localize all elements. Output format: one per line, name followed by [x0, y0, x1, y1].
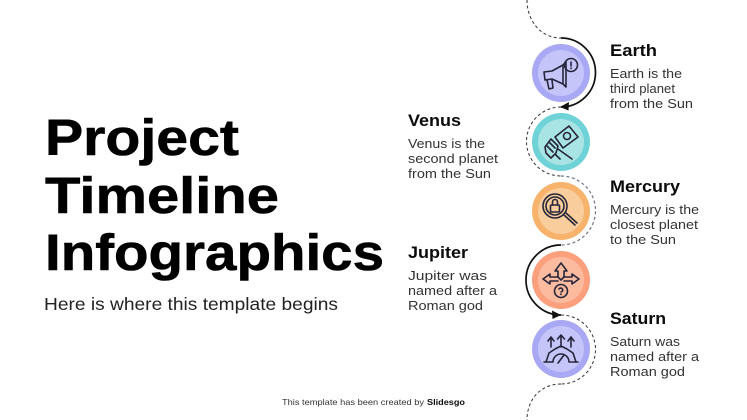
- label: Mercury: to the Sun: [610, 232, 676, 247]
- node: Mercury magnifier: [532, 182, 590, 240]
- label: Venus: second planet: [408, 151, 498, 166]
- label: Earth: Earth: [610, 41, 657, 60]
- label: Jupiter: named after a: [408, 283, 498, 298]
- credit line: This template has been created by: [282, 397, 425, 407]
- label: Jupiter: [408, 243, 498, 313]
- label: Earth: Earth is the: [610, 66, 682, 81]
- label: Saturn: Saturn: [610, 309, 666, 328]
- label: Venus: [408, 111, 498, 181]
- label: Jupiter: Jupiter: [408, 243, 468, 262]
- solid arc arrow: Earth: [560, 38, 596, 110]
- icon: arrows with question mark: [543, 263, 579, 298]
- label: Saturn: [610, 309, 700, 379]
- title: Project: [45, 109, 239, 166]
- title: Infographics: [45, 224, 384, 281]
- credit line: Slidesgo: [427, 397, 465, 407]
- label: Jupiter: Roman god: [408, 298, 483, 313]
- node: Saturn gear arrows: [532, 320, 590, 378]
- label: Saturn: Saturn was: [610, 334, 681, 349]
- icon: hand holding flag: [545, 126, 578, 159]
- label: Earth: [610, 41, 693, 111]
- label: Jupiter: Jupiter was: [408, 268, 488, 283]
- label: Venus: Venus: [408, 111, 461, 130]
- node: Earth megaphone: [532, 44, 590, 102]
- icon: megaphone: [544, 58, 578, 89]
- label: Earth: third planet: [610, 81, 675, 96]
- label: Mercury: Mercury: [610, 177, 681, 196]
- title: Timeline: [45, 167, 279, 224]
- node: Jupiter arrows: [532, 251, 590, 309]
- node: Venus flag in hand: [532, 113, 590, 171]
- label: Saturn: named after a: [610, 349, 700, 364]
- solid arc arrow: Jupiter: [526, 245, 561, 319]
- label: Venus: Venus is the: [408, 136, 485, 151]
- label: Earth: from the Sun: [610, 96, 693, 111]
- label: Saturn: Roman god: [610, 364, 685, 379]
- dashed timeline path: [526, 0, 596, 420]
- label: Mercury: Mercury is the: [610, 202, 699, 217]
- icon: gear with arrows: [544, 335, 578, 363]
- label: Venus: from the Sun: [408, 166, 491, 181]
- icon: magnifier with lock: [543, 194, 577, 225]
- subtitle: Here is where this template begins: [44, 294, 338, 314]
- label: Mercury: [610, 177, 699, 247]
- label: Mercury: closest planet: [610, 217, 698, 232]
- title: [45, 109, 384, 281]
